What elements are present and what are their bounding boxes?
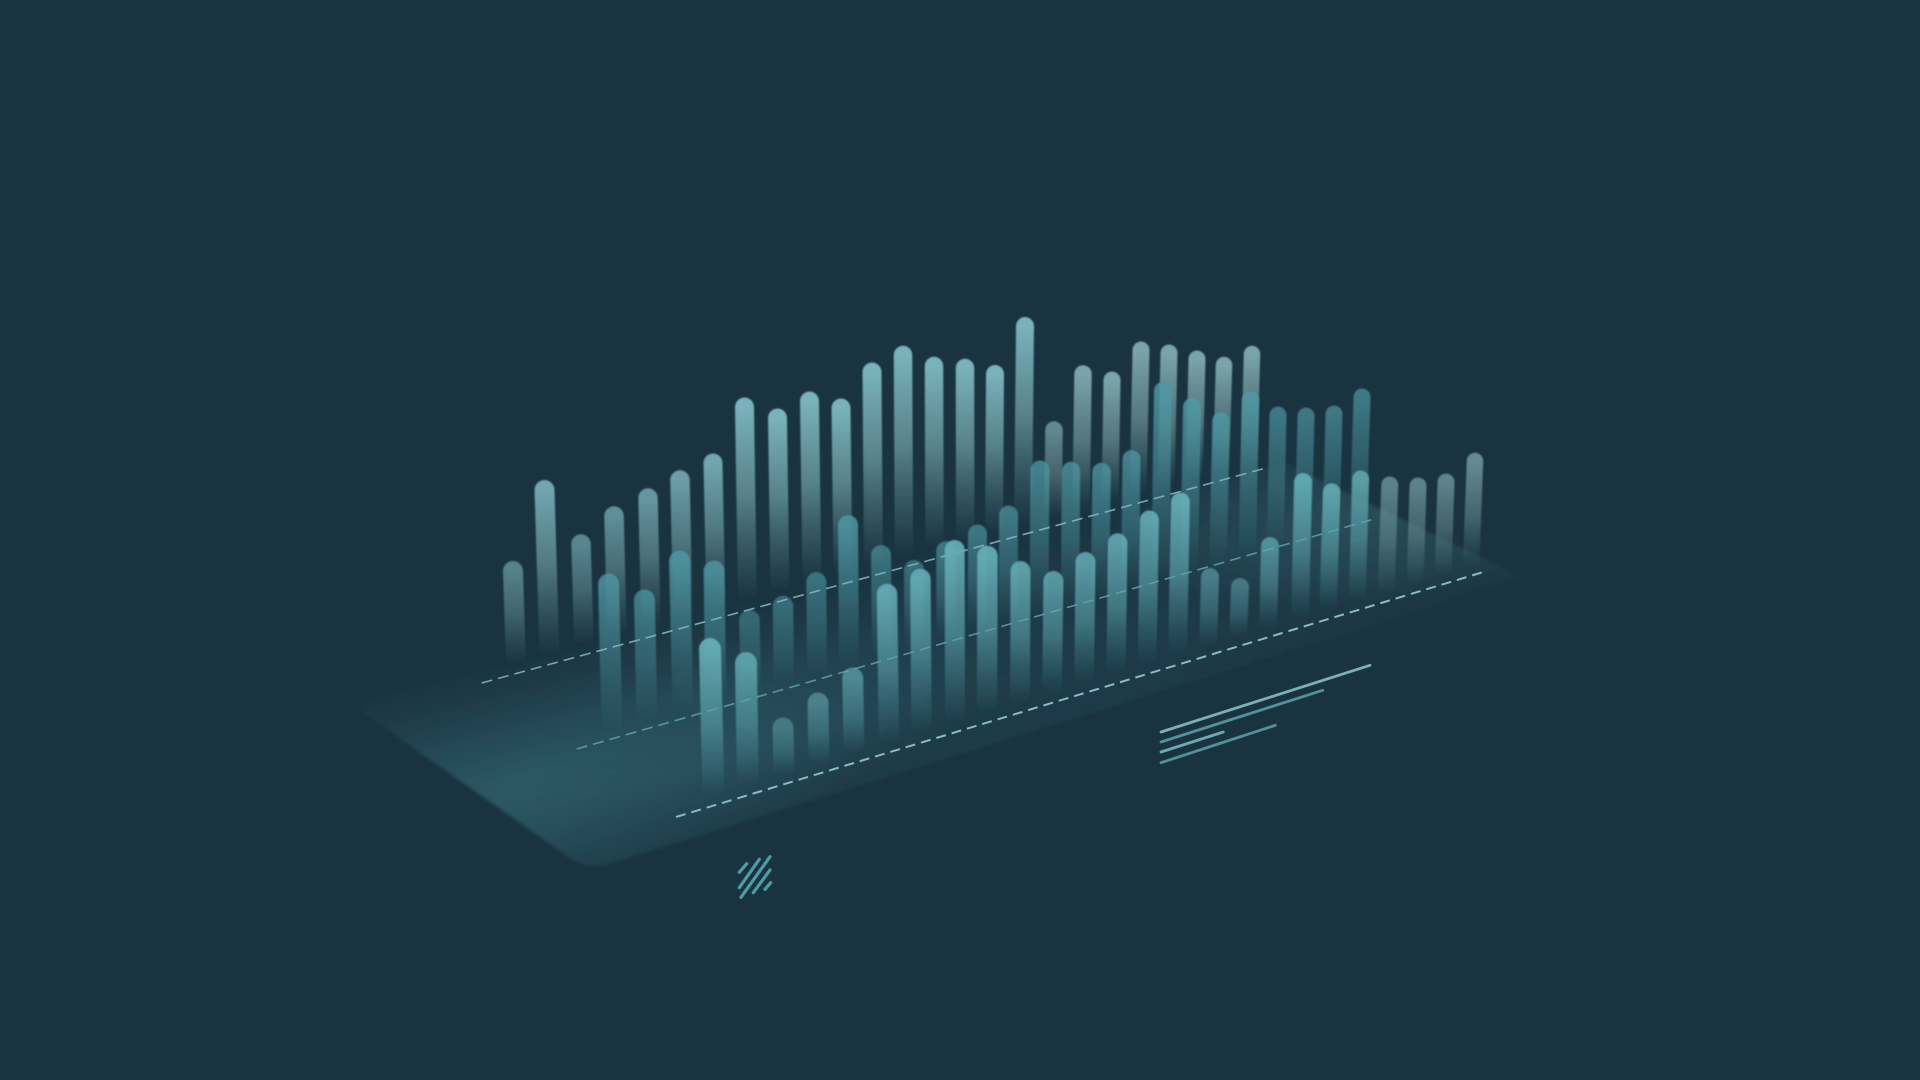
legend line 4	[1161, 725, 1275, 763]
bar	[841, 408, 843, 575]
bar	[1415, 486, 1418, 585]
bar	[744, 407, 748, 602]
bar	[853, 678, 854, 754]
bar	[1138, 350, 1141, 495]
bar	[1275, 415, 1278, 551]
bar	[1208, 577, 1210, 647]
bar	[998, 515, 1018, 624]
bar	[1238, 587, 1240, 638]
bar	[609, 584, 612, 732]
platform base	[361, 463, 1524, 866]
bar	[936, 551, 956, 640]
bar	[945, 550, 965, 724]
bar	[749, 620, 751, 694]
bar	[848, 525, 849, 667]
bar	[1116, 543, 1118, 674]
legend line 2	[1161, 690, 1323, 742]
dashed guide line: front	[676, 571, 1487, 817]
bar	[994, 374, 995, 534]
bar	[1189, 407, 1192, 574]
bar	[783, 606, 784, 685]
bar	[1178, 502, 1180, 656]
bar	[1010, 571, 1030, 704]
bar	[648, 498, 651, 628]
bar	[1247, 400, 1250, 558]
icon: hatched square	[739, 857, 771, 897]
bar	[920, 579, 922, 734]
bar	[1328, 492, 1332, 611]
bar	[881, 555, 882, 658]
bar	[956, 368, 974, 542]
dashed guide line: middle	[577, 519, 1374, 749]
bar	[1130, 459, 1132, 591]
legend line 3	[1161, 732, 1223, 752]
bar	[783, 728, 784, 775]
bar	[1081, 374, 1083, 510]
bar	[544, 490, 550, 656]
bar	[1166, 353, 1169, 487]
bar	[903, 355, 904, 559]
bar	[1052, 581, 1053, 694]
bar	[714, 571, 716, 703]
bar	[614, 516, 617, 637]
front row of bars	[710, 461, 1475, 797]
bar	[1070, 471, 1071, 607]
bar	[810, 401, 812, 584]
bar	[1053, 430, 1054, 518]
bar	[1221, 365, 1224, 472]
bar	[968, 534, 987, 631]
bar	[1100, 472, 1102, 599]
bar	[1110, 380, 1112, 502]
bar	[1303, 416, 1306, 544]
bar	[1357, 479, 1361, 602]
bar	[644, 600, 647, 722]
dashed guide line: back	[482, 468, 1266, 683]
bar	[1358, 397, 1362, 529]
bar	[581, 544, 584, 646]
bar	[713, 463, 716, 610]
bar	[1218, 421, 1221, 566]
bar	[1386, 485, 1390, 594]
bar	[746, 663, 748, 786]
legend lines	[1161, 665, 1370, 763]
bar	[778, 418, 780, 593]
bar	[977, 556, 998, 714]
middle row of bars	[609, 391, 1362, 732]
bar	[1268, 546, 1270, 629]
bar	[887, 594, 889, 744]
bar	[1039, 470, 1040, 615]
bar	[680, 480, 683, 619]
bar	[513, 571, 516, 665]
bar	[1023, 326, 1025, 526]
bar	[1443, 482, 1446, 576]
bar	[1084, 562, 1086, 684]
bar	[1471, 461, 1475, 567]
bar	[1331, 414, 1334, 536]
legend line 1	[1161, 665, 1370, 732]
back row of bars	[513, 326, 1252, 665]
bar	[1300, 482, 1303, 619]
bar	[806, 582, 827, 676]
bar	[710, 649, 714, 797]
bar	[1249, 354, 1252, 465]
bar	[1160, 391, 1163, 582]
bar	[1147, 520, 1149, 665]
isometric chart illustration	[386, 316, 1490, 899]
bar	[904, 570, 924, 649]
bar	[818, 703, 819, 764]
bar	[1194, 359, 1197, 480]
bar	[925, 366, 944, 550]
bar	[680, 561, 683, 713]
bar	[872, 372, 874, 567]
